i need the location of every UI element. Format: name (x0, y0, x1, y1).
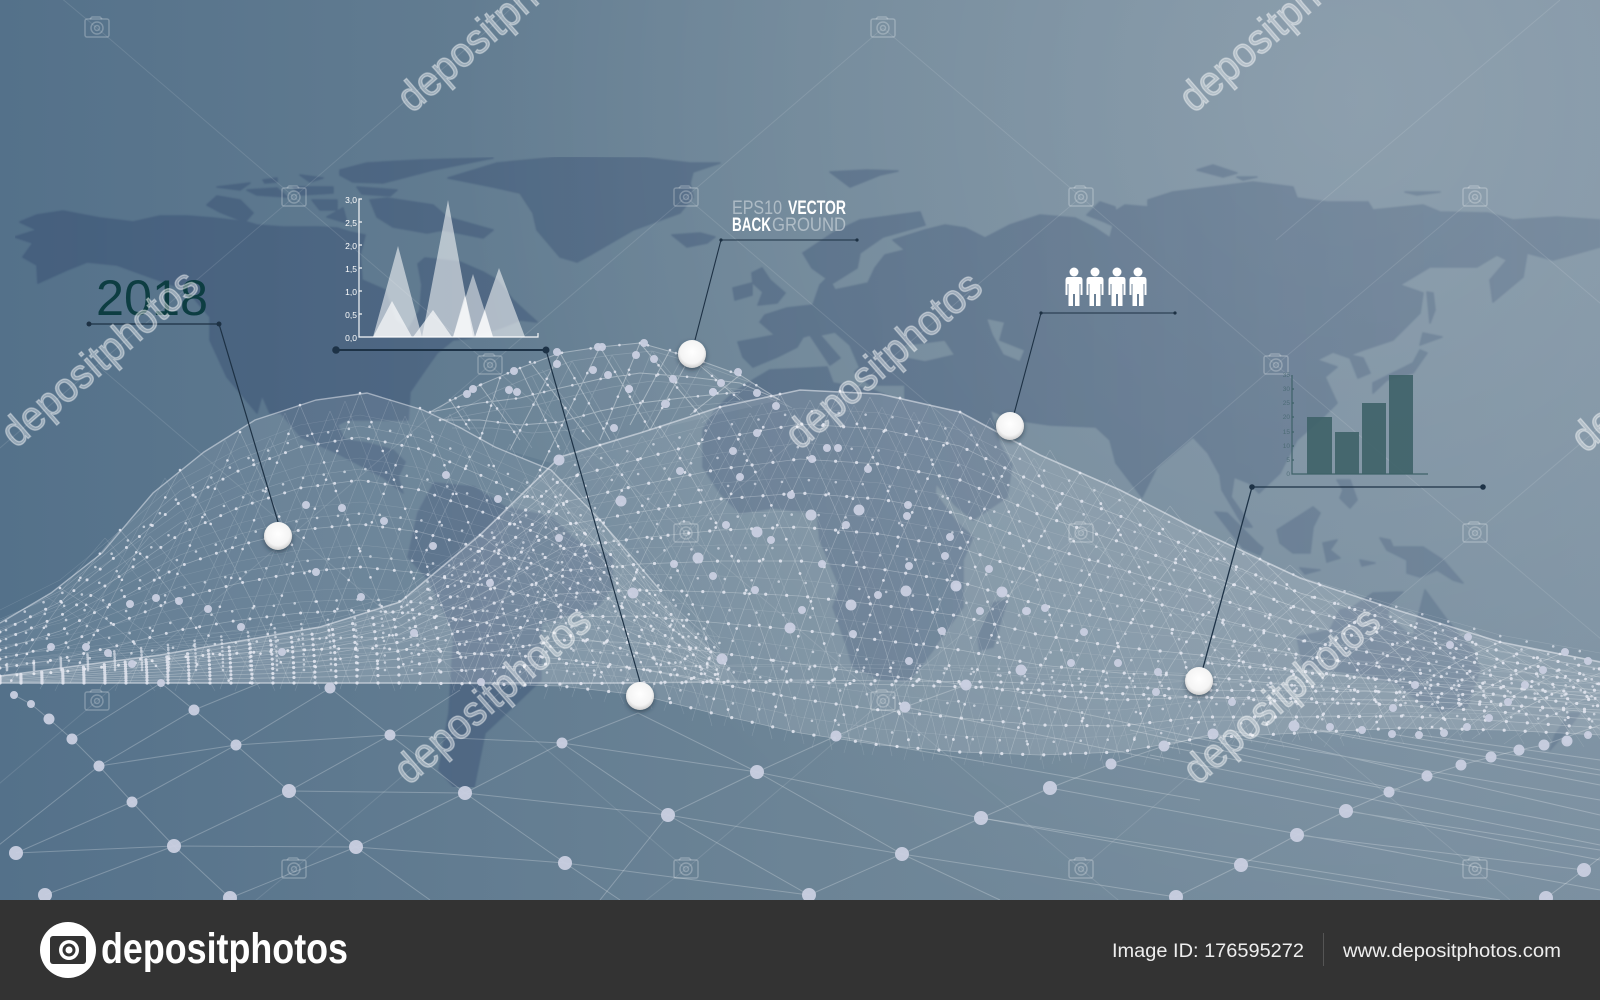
icon: four people (1066, 268, 1146, 306)
chart axis labels: 3,0 (345, 195, 357, 205)
wave mesh surface: front wave (0, 343, 1600, 769)
wave mesh surface: back hills (0, 343, 792, 691)
callout: year 2018 (86, 270, 278, 522)
bar chart axis labels: 5 (1286, 457, 1290, 464)
bars (1307, 375, 1413, 474)
bar chart axis labels (1283, 372, 1290, 478)
lower sparse network (0, 683, 1600, 900)
callout: EPS10 vector background: EPS10 (732, 198, 782, 219)
callout: year 2018: 2018 (96, 270, 208, 326)
depositphotos watermarks: depositphotos (384, 597, 600, 793)
bar chart axis labels: 0 (1286, 471, 1290, 478)
bar chart axis labels: 10 (1283, 443, 1290, 450)
chart leader line (332, 346, 640, 682)
callout: EPS10 vector background (695, 198, 859, 340)
icon: camera logo (40, 922, 96, 978)
depositphotos watermarks: depositphotos (775, 262, 991, 458)
bar chart axis labels: 35 (1283, 372, 1290, 379)
chart axis labels: 2,5 (345, 218, 357, 228)
depositphotos watermarks (0, 0, 1600, 793)
world map (15, 157, 1600, 787)
chart axis labels (345, 195, 357, 343)
bar chart axis labels: 25 (1283, 400, 1290, 407)
watermark camera icons (85, 17, 1487, 878)
bar chart axis labels: 15 (1283, 429, 1290, 436)
image id: Image ID: 176595272 (1112, 940, 1304, 962)
map pins (264, 340, 1213, 710)
chart peaks (373, 200, 525, 337)
callout: EPS10 vector background: BACK (732, 215, 771, 236)
bar chart leader line (1203, 484, 1486, 668)
footer bar (0, 900, 1600, 1000)
callout: EPS10 vector background: VECTOR (788, 198, 846, 219)
chart axis labels: 0,5 (345, 310, 357, 320)
bar chart (1203, 372, 1486, 668)
chart axis labels: 1,0 (345, 287, 357, 297)
depositphotos watermarks: depositphotos (1173, 597, 1389, 793)
chart axis labels: 1,5 (345, 264, 357, 274)
logo wordmark: depositphotos (101, 925, 348, 973)
bar chart axis labels: 30 (1283, 386, 1290, 393)
network dots (14, 343, 1588, 898)
chart axes (359, 199, 538, 337)
site url: www.depositphotos.com (1342, 940, 1561, 962)
wave mesh (0, 343, 1600, 769)
bar chart axes (1292, 375, 1428, 474)
bar chart axis labels: 20 (1283, 414, 1290, 421)
chart axis labels: 0,0 (345, 333, 357, 343)
area chart (332, 195, 640, 682)
callout: EPS10 vector background: GROUND (772, 215, 846, 236)
callout: people icons (1014, 268, 1177, 414)
chart axis labels: 2,0 (345, 241, 357, 251)
